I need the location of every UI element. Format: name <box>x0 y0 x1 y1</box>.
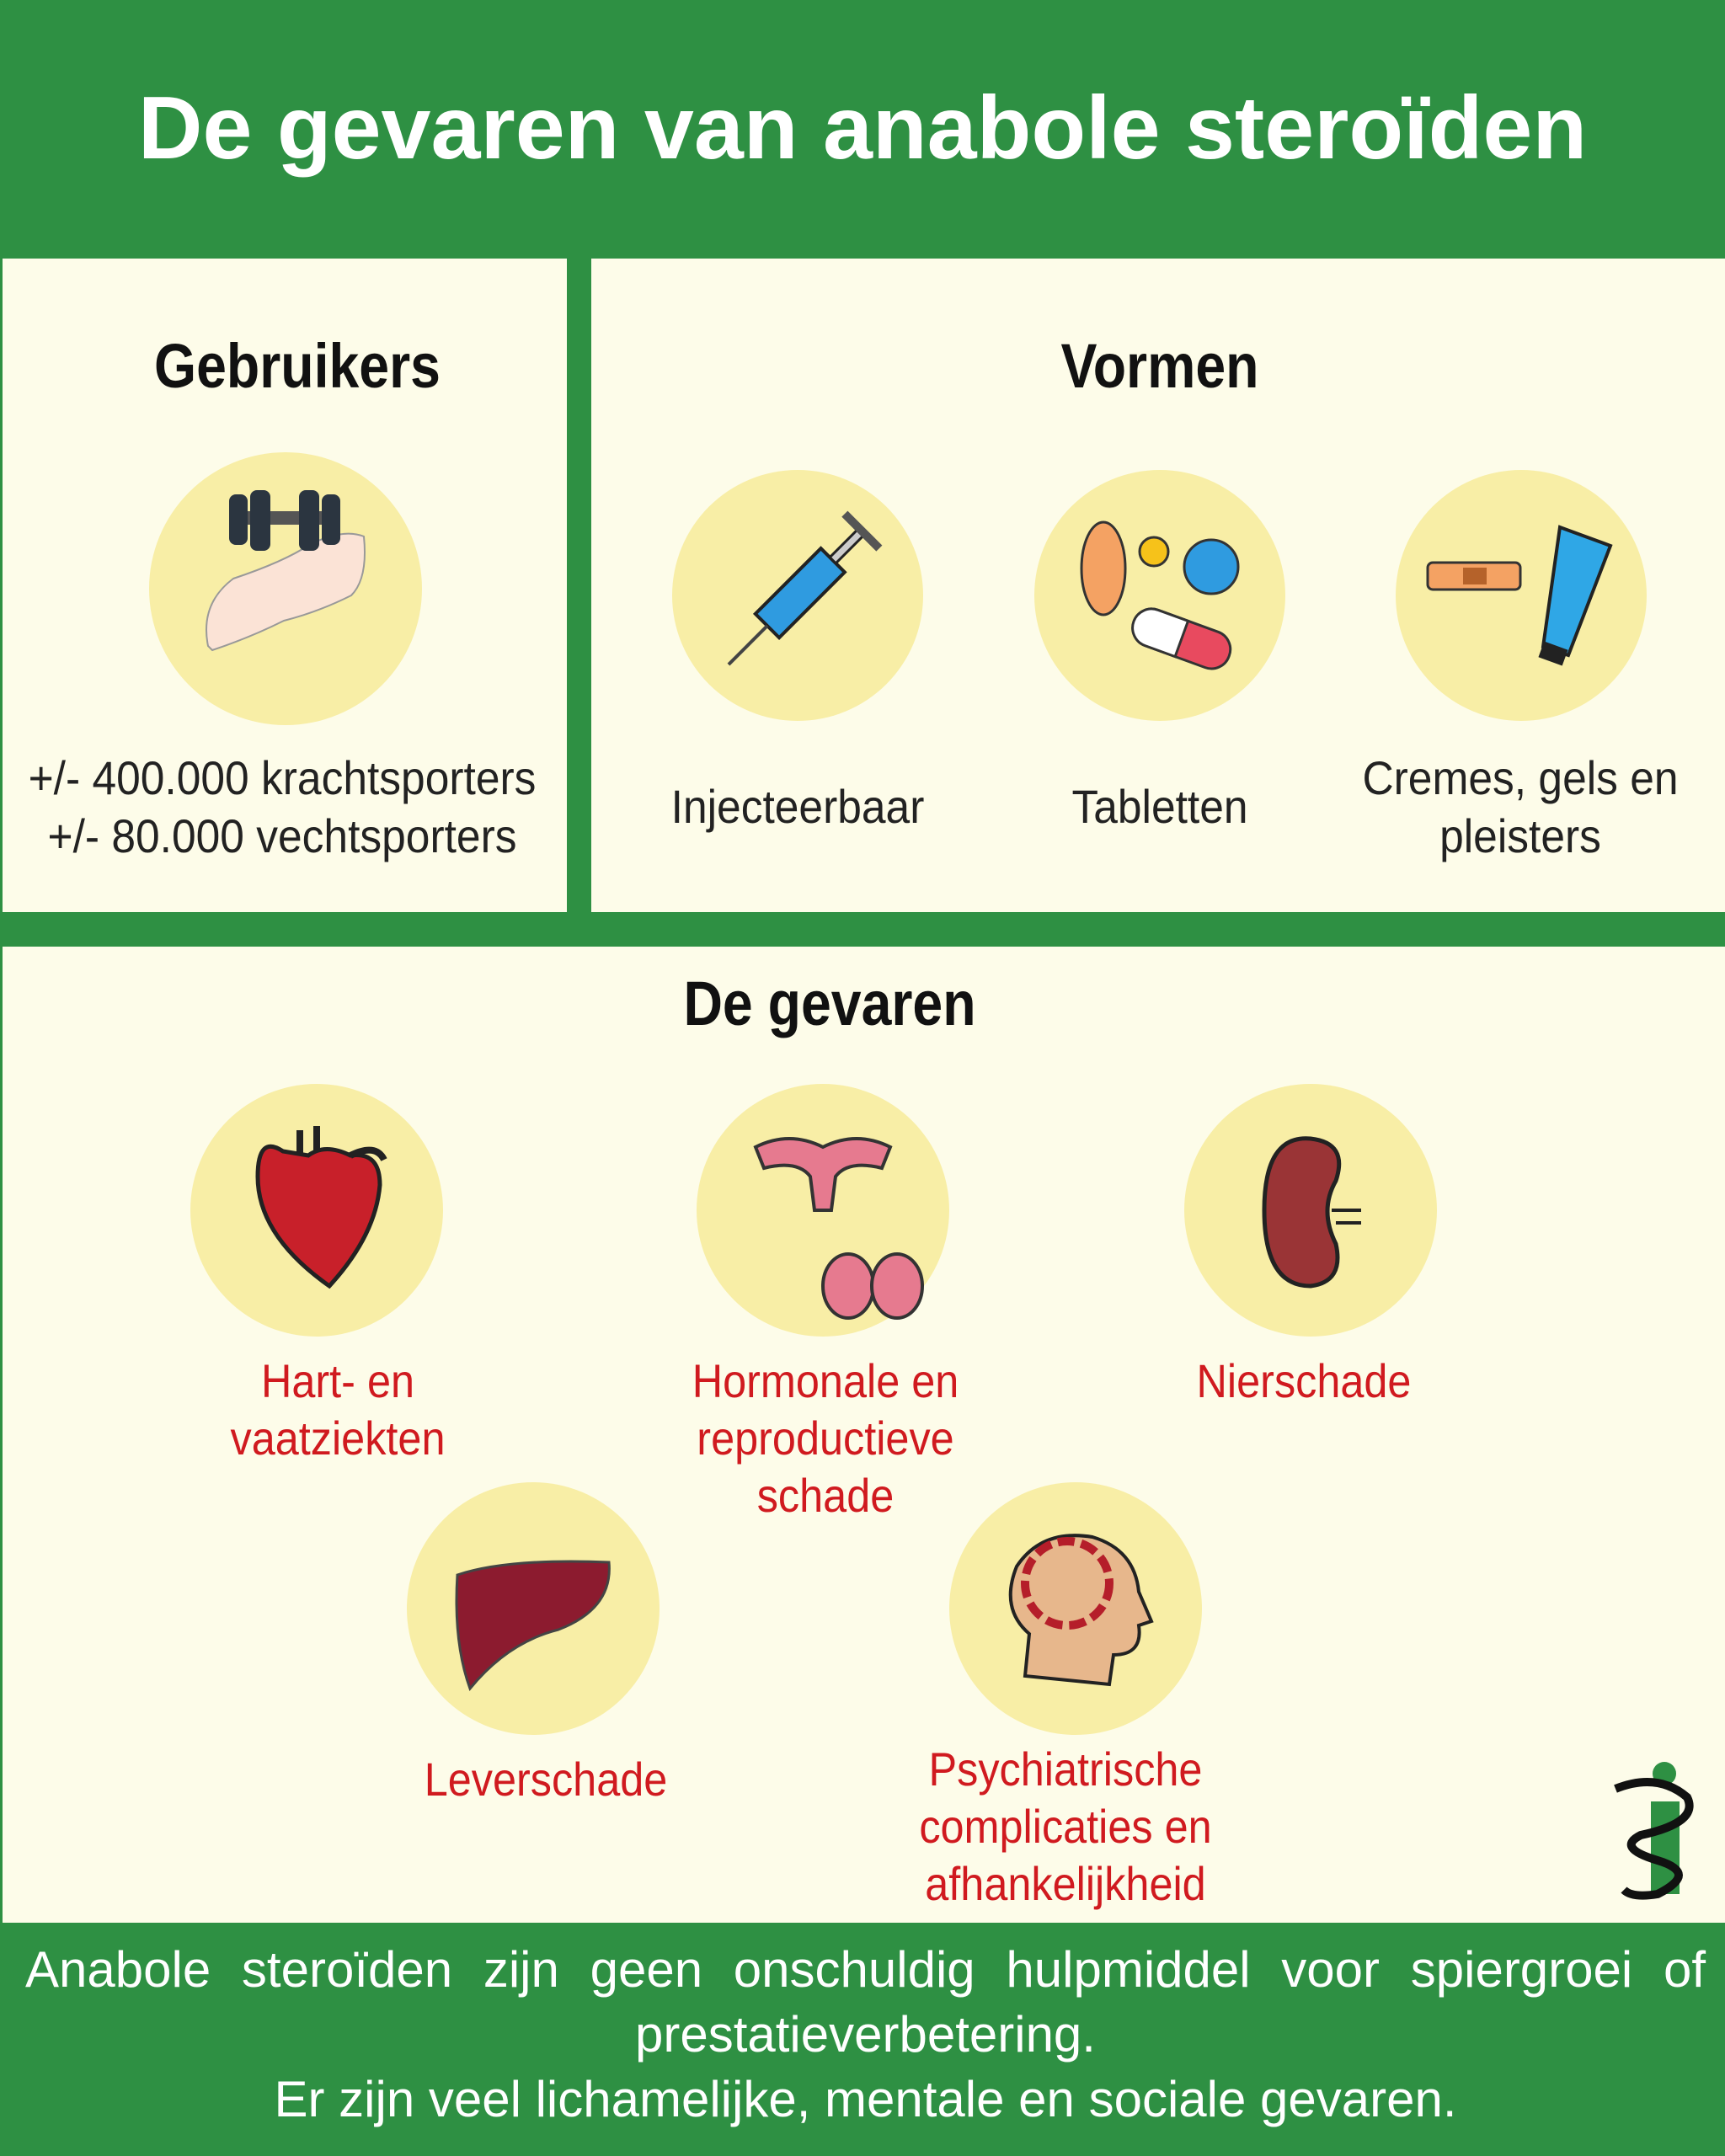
panel: vormen <box>591 259 1725 912</box>
panel: gebruikers <box>3 259 567 912</box>
heading: vormen: Vormen <box>1061 331 1258 401</box>
panel: de gevaren <box>3 947 1725 1923</box>
footer text: Er zijn veel lichamelijke, mentale en sociale gevaren. <box>274 2071 1457 2127</box>
label: psychiatrisch <box>919 1742 1212 1910</box>
footer text: prestatieverbetering. <box>635 2006 1096 2063</box>
icon: head <box>949 1482 1202 1735</box>
label: hart: vaatziekten <box>231 1412 445 1465</box>
text: users <box>29 751 536 862</box>
label: cremes <box>1362 751 1679 862</box>
icon: syringe <box>672 470 923 721</box>
label: cremes: pleisters <box>1439 809 1601 862</box>
footer text <box>25 1941 1706 2127</box>
icon: reproductive <box>697 1084 949 1337</box>
icon: tablets <box>1034 470 1285 721</box>
label: hart <box>231 1354 445 1465</box>
label: nierschade: Nierschade <box>1197 1354 1411 1407</box>
title: De gevaren van anabole steroïden <box>138 78 1587 178</box>
heading: de gevaren: De gevaren <box>683 969 976 1038</box>
label: psychiatrisch: afhankelijkheid <box>925 1857 1206 1910</box>
label: hormonaal <box>692 1354 959 1522</box>
heading: gebruikers: Gebruikers <box>154 331 441 401</box>
icon: logo <box>1614 1762 1694 1900</box>
icon: liver <box>407 1482 660 1735</box>
text: users: +/- 80.000 vechtsporters <box>47 809 517 862</box>
label: tabletten: Tabletten <box>1071 780 1248 833</box>
label: psychiatrisch: complicaties en <box>919 1800 1212 1853</box>
label: hart: Hart- en <box>261 1354 414 1407</box>
label: leverschade: Leverschade <box>425 1753 667 1806</box>
label: hormonaal: Hormonale en <box>692 1354 959 1407</box>
footer text: Anabole steroïden zijn geen onschuldig hulpmiddel voor spiergroei of <box>25 1941 1706 1998</box>
icon: kidney <box>1184 1084 1437 1337</box>
label: psychiatrisch: Psychiatrische <box>929 1742 1202 1796</box>
label: injecteerbaar: Injecteerbaar <box>671 780 924 833</box>
icon: dumbbell arm <box>149 452 422 725</box>
label: hormonaal: reproductieve <box>697 1412 954 1465</box>
label: hormonaal: schade <box>757 1469 894 1522</box>
label: cremes: Cremes, gels en <box>1362 751 1679 804</box>
icon: heart <box>190 1084 443 1337</box>
text: users: +/- 400.000 krachtsporters <box>29 751 536 804</box>
icon: creams <box>1396 470 1647 721</box>
